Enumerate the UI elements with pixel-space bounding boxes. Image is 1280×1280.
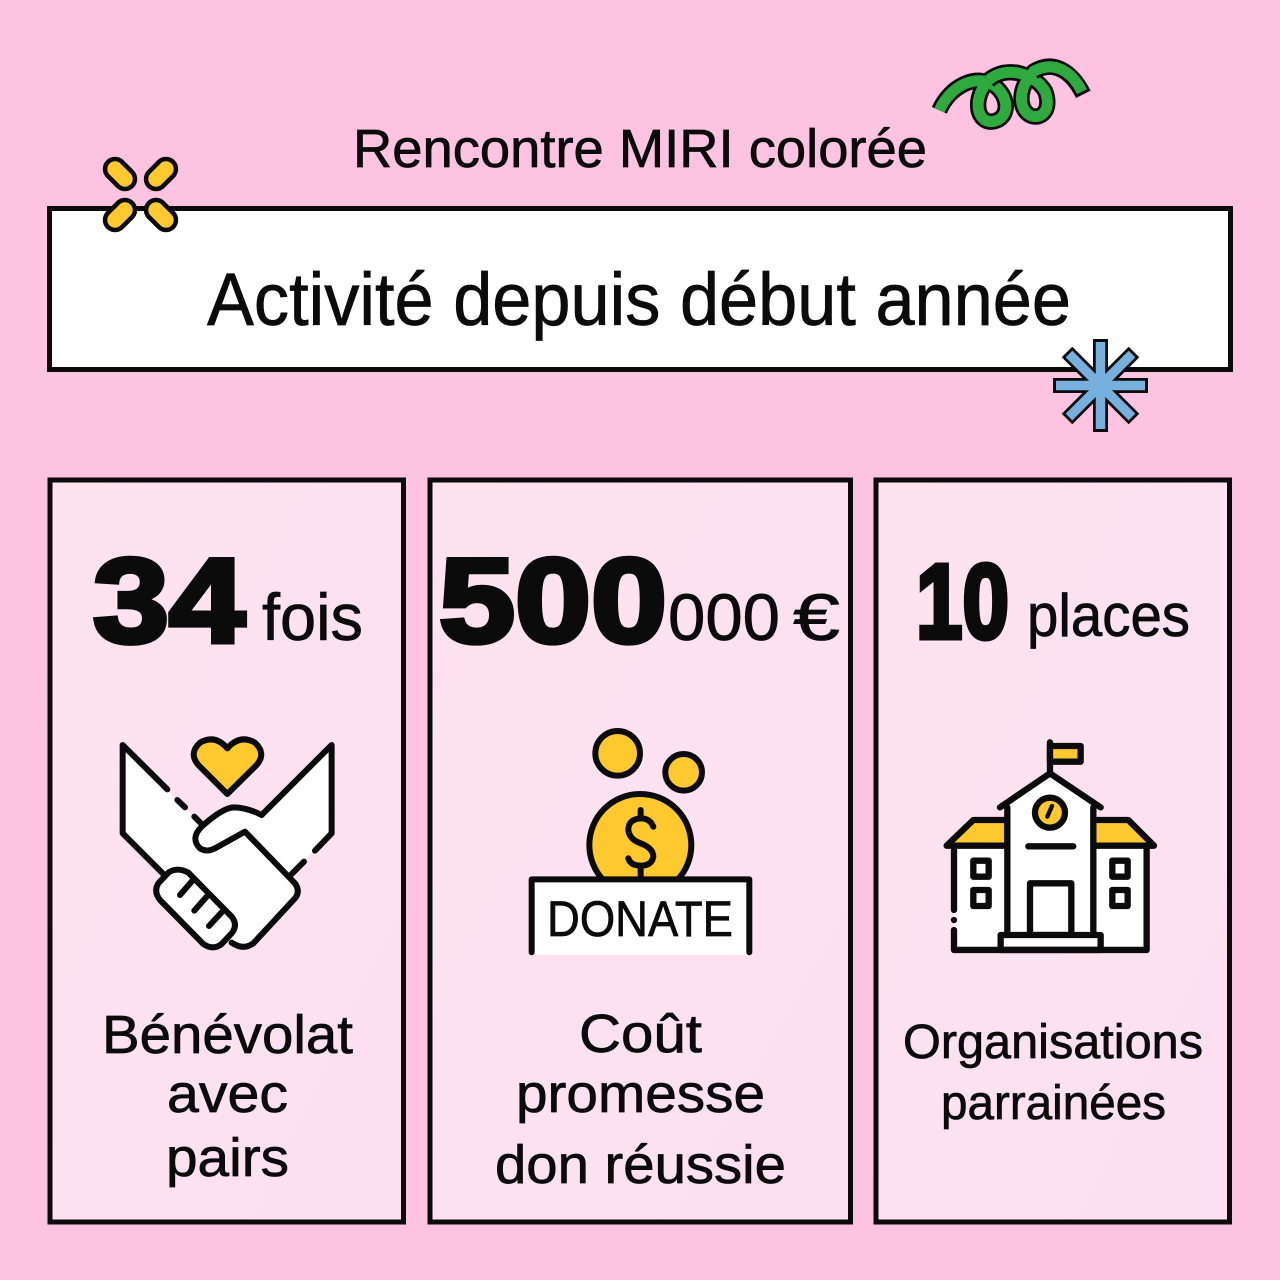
stat: 34 fois: 34: [93, 534, 245, 668]
panel: bénévolat: [50, 480, 404, 1222]
stat: 10 places: [916, 543, 1190, 661]
label: promesse: [516, 1064, 765, 1124]
label: Coût: [579, 1004, 702, 1064]
decoration: green spiral: [939, 67, 1083, 122]
label: [903, 1016, 1203, 1130]
stat: 34 fois: fois: [262, 580, 363, 654]
donate label: DONATE: [547, 891, 733, 947]
header banner: [50, 208, 1230, 370]
stat: 500 000 €: 500: [439, 534, 667, 668]
stat: 500 000 €: [439, 534, 840, 668]
stat: 500 000 €: 000: [668, 580, 780, 654]
stat: 500 000 €: €: [793, 580, 840, 654]
label: [102, 1005, 353, 1188]
label: don réussie: [495, 1135, 786, 1195]
label: Bénévolat: [102, 1005, 353, 1065]
label: [495, 1004, 786, 1195]
decoration: yellow flower: [101, 155, 180, 234]
stat: 10 places: places: [1027, 582, 1190, 649]
icon: handshake with heart: [123, 739, 332, 947]
icon: donate coins: [532, 731, 749, 955]
stat: 10 places: 10: [916, 543, 1009, 661]
label: avec: [167, 1064, 288, 1124]
label: pairs: [166, 1128, 289, 1188]
stat: 34 fois: [93, 534, 363, 668]
title: Rencontre MIRI colorée: [353, 119, 927, 179]
label: Organisations: [903, 1016, 1203, 1069]
label: parrainées: [941, 1077, 1166, 1130]
panel: coût: [430, 480, 850, 1222]
heading: Activité depuis début année: [207, 258, 1071, 341]
panel: organisations: [876, 480, 1230, 1222]
icon: school building: [947, 742, 1154, 950]
decoration: blue asterisk: [1053, 339, 1148, 432]
